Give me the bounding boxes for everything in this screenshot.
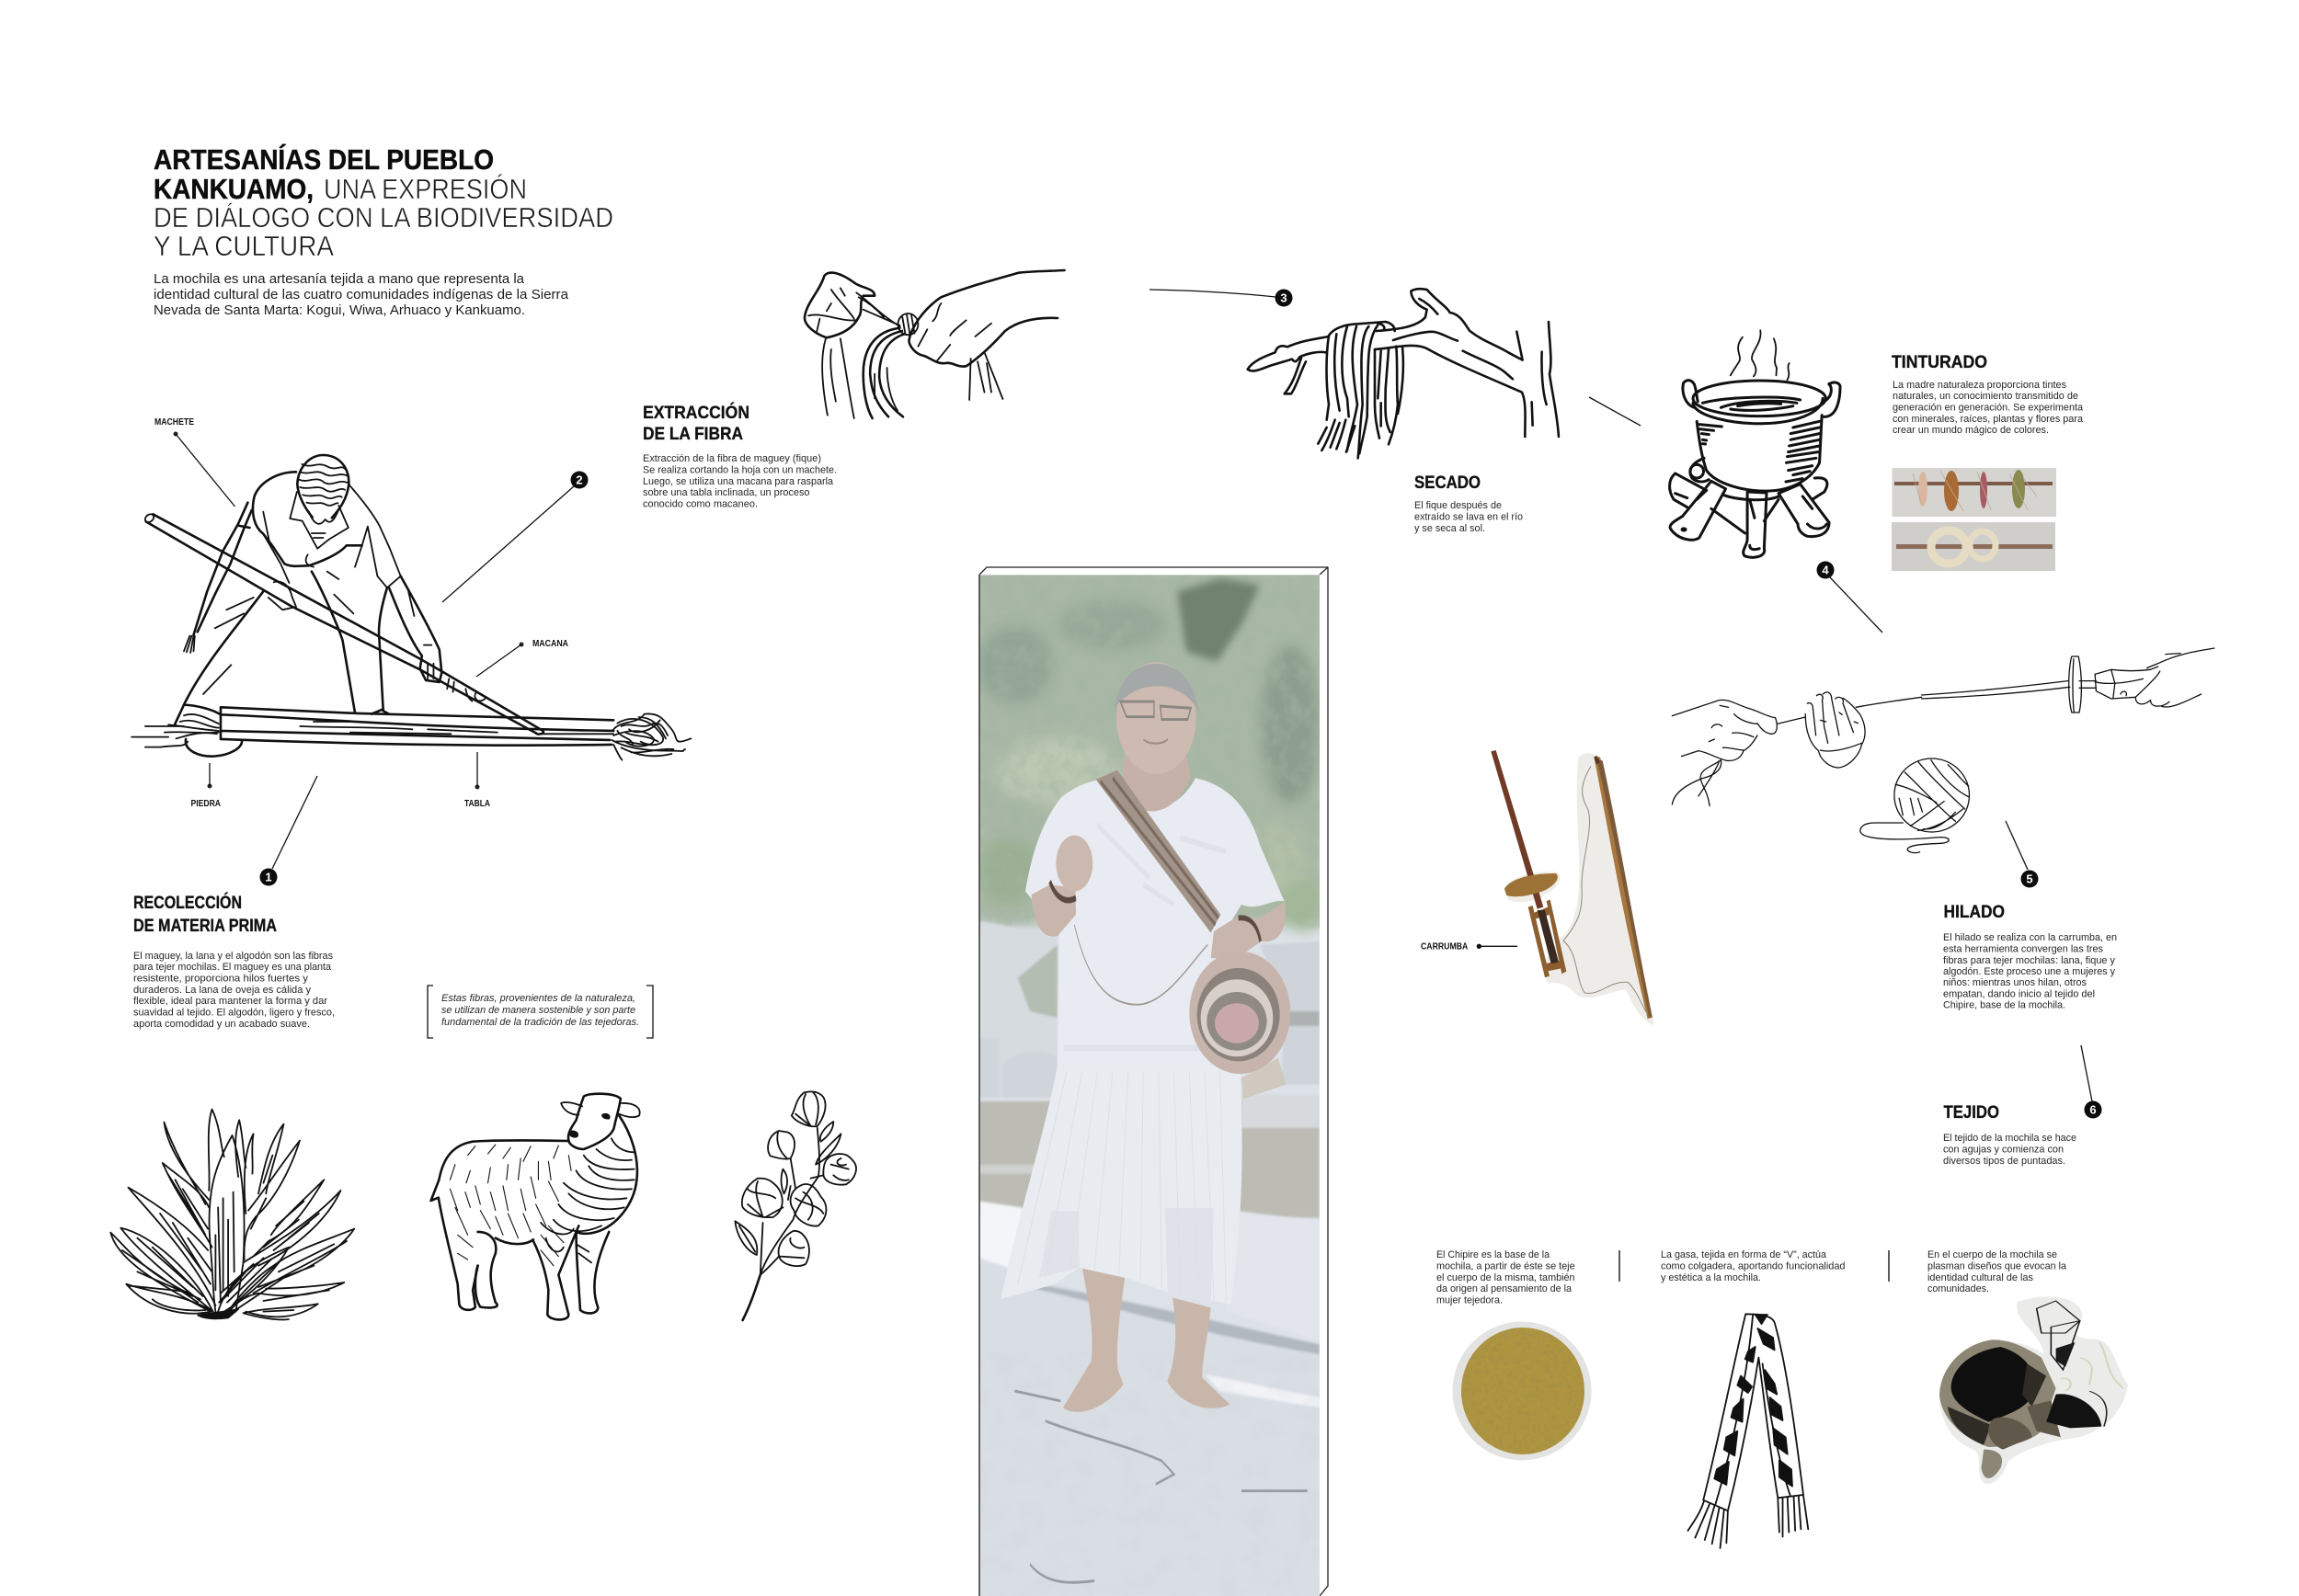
arrow line between secado and tinturado — [1589, 397, 1641, 426]
column: gasa — [1661, 1249, 1846, 1548]
body text: sobre una tabla inclinada, un proceso — [643, 487, 810, 498]
steam — [1731, 330, 1790, 380]
illustration: hands extracting fibre — [805, 270, 1065, 418]
intro text: La mochila es una artesanía tejida a mano que representa la — [154, 272, 525, 287]
body text: naturales, un conocimiento transmitido de — [1893, 391, 2078, 402]
intro text — [154, 272, 569, 318]
right hand — [2095, 667, 2160, 699]
text: plasman diseños que evocan la — [1927, 1261, 2066, 1272]
middle hand — [1805, 698, 1865, 768]
photo: mochila body — [1939, 1296, 2128, 1484]
text: En el cuerpo de la mochila se — [1927, 1249, 2057, 1260]
left hand — [1672, 700, 1777, 760]
body text: Luego, se utiliza una macana para rasparla — [643, 476, 833, 487]
machete sheath — [184, 503, 252, 653]
woman legs and feet — [1063, 1264, 1230, 1412]
section: hilado: esta herramienta convergen las tres — [1943, 943, 2103, 954]
title: Y LA CULTURA — [154, 230, 334, 262]
frame — [979, 567, 1328, 1596]
step 6 marker: 6 — [2089, 1103, 2097, 1116]
photo: woman with mochila — [972, 564, 1327, 1596]
torso and arms — [253, 472, 441, 682]
trees — [972, 564, 1327, 931]
neck and head — [1122, 752, 1191, 811]
text — [1436, 1249, 1575, 1305]
body text: crear un mundo mágico de colores. — [1893, 425, 2049, 436]
label: machete — [154, 417, 235, 507]
rock ground — [980, 1201, 1320, 1407]
section: secado — [1414, 473, 1523, 534]
text: como colgadera, aportando funcionalidad — [1661, 1261, 1846, 1272]
section: secado: El fique después de — [1414, 500, 1502, 511]
photo: carrumba tool — [1421, 750, 1653, 1025]
section: hilado — [1943, 902, 2117, 1011]
intro text: identidad cultural de las cuatro comunidades indígenas de la Sierra — [154, 288, 569, 302]
arms — [1032, 884, 1076, 937]
label: piedra — [191, 763, 221, 809]
body text: para tejer mochilas. El maguey es una planta — [133, 962, 331, 973]
step 2 marker: 2 — [576, 473, 583, 487]
section: hilado: fibras para tejer mochilas: lana, fique y — [1943, 955, 2116, 966]
stone — [186, 739, 242, 757]
section: hilado: Chipire, base de la mochila. — [1943, 1000, 2065, 1011]
section: secado: extraído se lava en el río — [1414, 511, 1523, 522]
body text: suavidad al tejido. El algodón, ligero y fresco, — [133, 1008, 335, 1019]
section: tinturado — [1892, 352, 2083, 571]
text: mujer tejedora. — [1436, 1294, 1503, 1305]
illustration: sheep — [431, 1094, 640, 1319]
body text: aporta comodidad y un acabado suave. — [133, 1019, 310, 1030]
section: tejido — [1943, 1102, 2076, 1167]
logs — [1670, 458, 1829, 557]
mochila strap — [1096, 770, 1220, 932]
illustration: maguey plant — [110, 1110, 354, 1319]
step 4 marker — [1817, 561, 1882, 633]
text: comunidades. — [1927, 1283, 1989, 1294]
portrait photo panel with book frame — [972, 564, 1328, 1596]
illustration: hands spinning with carrumba — [1672, 648, 2214, 853]
section: tejido: TEJIDO — [1944, 1102, 1999, 1123]
bracket quote — [428, 986, 653, 1038]
label: tabla: TABLA — [464, 799, 490, 809]
bracket quote: fundamental de la tradición de las tejedoras. — [441, 1017, 639, 1028]
divider — [1618, 1250, 1620, 1282]
text: identidad cultural de las — [1927, 1272, 2033, 1283]
heading: TINTURADO — [1892, 352, 1987, 372]
intro text: Nevada de Santa Marta: Kogui, Wiwa, Arhuaco y Kankuamo. — [154, 303, 525, 318]
step 1 marker: 1 — [265, 870, 272, 884]
text: mochila, a partir de éste se teje — [1436, 1261, 1575, 1272]
title: ARTESANÍAS DEL PUEBLO — [154, 143, 494, 176]
section: hilado: HILADO — [1944, 902, 2005, 922]
text: La gasa, tejida en forma de “V”, actúa — [1661, 1249, 1826, 1260]
text — [1661, 1249, 1846, 1283]
section: extraccion de la fibra — [643, 401, 837, 509]
photo: dyed fibres — [1893, 468, 2056, 517]
bracket quote: Estas fibras, provenientes de la naturaleza, — [441, 993, 635, 1004]
step 2 marker — [442, 471, 589, 602]
text: y estética a la mochila. — [1661, 1272, 1761, 1283]
body text: con minerales, raíces, plantas y flores para — [1893, 414, 2083, 425]
body text: conocido como macaneo. — [643, 498, 758, 509]
illustration: woven strap — [1687, 1314, 1808, 1548]
section: secado: SECADO — [1414, 473, 1481, 493]
section: tejido: diversos tipos de puntadas. — [1943, 1156, 2065, 1167]
step 3 marker — [1150, 289, 1293, 307]
pot — [1683, 381, 1840, 491]
label: macana — [476, 639, 568, 677]
section: recoleccion de materia prima — [133, 891, 335, 1030]
heading — [643, 401, 749, 444]
legs — [174, 572, 389, 725]
body text — [133, 951, 335, 1030]
body text: duraderos. La lana de oveja es cálida y — [133, 985, 312, 996]
thread — [1778, 697, 1922, 724]
step 5 marker — [2006, 821, 2038, 888]
illustration: fibre drying on a branch — [1248, 289, 1559, 458]
text: el cuerpo de la misma, también — [1436, 1272, 1575, 1283]
illustration: cotton branch — [735, 1091, 856, 1320]
label: carrumba: CARRUMBA — [1421, 942, 1468, 952]
body text — [1893, 380, 2083, 436]
body text: Extracción de la fibra de maguey (fique) — [643, 453, 821, 464]
step 1 marker — [259, 776, 317, 886]
title — [154, 143, 613, 262]
mochila bag — [1189, 952, 1290, 1100]
labels of the man illustration — [154, 417, 568, 809]
photo: raw fibre — [1892, 522, 2055, 571]
body text: resistente, proporciona hilos fuertes y — [133, 973, 309, 984]
heading: DE LA FIBRA — [643, 424, 743, 444]
label: macana: MACANA — [532, 639, 568, 649]
left dark edge — [978, 575, 980, 1596]
illustration: dye pot on fire — [1670, 330, 1840, 557]
bracket quote: se utilizan de manera sostenible y son parte — [441, 1005, 635, 1016]
body text — [643, 453, 837, 509]
section: hilado: El hilado se realiza con la carrumba, en — [1943, 932, 2117, 943]
label: piedra: PIEDRA — [191, 799, 221, 809]
label: carrumba — [1421, 942, 1517, 952]
heading: EXTRACCIÓN — [643, 401, 749, 423]
body text: flexible, ideal para mantener la forma y dar — [133, 996, 327, 1007]
heading: DE MATERIA PRIMA — [133, 916, 277, 936]
section: secado: y se seca al sol. — [1414, 523, 1485, 534]
blouse — [1025, 778, 1285, 1065]
title: KANKUAMO, — [154, 173, 314, 205]
title: DE DIÁLOGO CON LA BIODIVERSIDAD — [154, 201, 613, 234]
label: tabla — [464, 752, 490, 809]
section: hilado: algodón. Este proceso une a mujeres y — [1943, 966, 2116, 977]
illustration: man scraping fibre with macana — [132, 455, 691, 760]
divider — [1888, 1250, 1890, 1282]
step 3 marker: 3 — [1280, 291, 1287, 305]
heading: RECOLECCIÓN — [133, 891, 242, 913]
skirt — [1001, 1065, 1242, 1305]
body text: La madre naturaleza proporciona tintes — [1893, 380, 2066, 391]
step 6 marker — [2081, 1045, 2102, 1118]
photo: chipire base — [1453, 1322, 1591, 1460]
heading — [133, 891, 277, 936]
text — [1927, 1249, 2066, 1294]
macana pole — [143, 513, 543, 735]
board with fibre — [132, 707, 691, 760]
yarn ball — [1894, 758, 1969, 832]
rocks — [979, 921, 1320, 1218]
head with hair — [297, 455, 349, 524]
step 5 marker: 5 — [2026, 872, 2033, 886]
step 4 marker: 4 — [1822, 563, 1829, 577]
column: chipire — [1436, 1249, 1591, 1460]
body text: El maguey, la lana y el algodón son las fibras — [133, 951, 333, 962]
river — [979, 1101, 1320, 1218]
title: UNA EXPRESIÓN — [324, 173, 527, 205]
section: hilado: empatan, dando inicio al tejido del — [1943, 989, 2095, 1000]
section: tejido: El tejido de la mochila se hace — [1943, 1133, 2076, 1144]
text: da origen al pensamiento de la — [1436, 1283, 1572, 1294]
section: tejido: con agujas y comienza con — [1943, 1144, 2064, 1155]
spindle — [1922, 681, 2070, 699]
label: machete: MACHETE — [154, 417, 194, 428]
text: El Chipire es la base de la — [1436, 1249, 1550, 1260]
column: cuerpo de la mochila — [1927, 1249, 2128, 1484]
body text: generación en generación. Se experimenta — [1893, 403, 2083, 414]
body text: Se realiza cortando la hoja con un machete. — [643, 465, 837, 476]
section: hilado: niños: mientras unos hilan, otros — [1943, 977, 2087, 988]
